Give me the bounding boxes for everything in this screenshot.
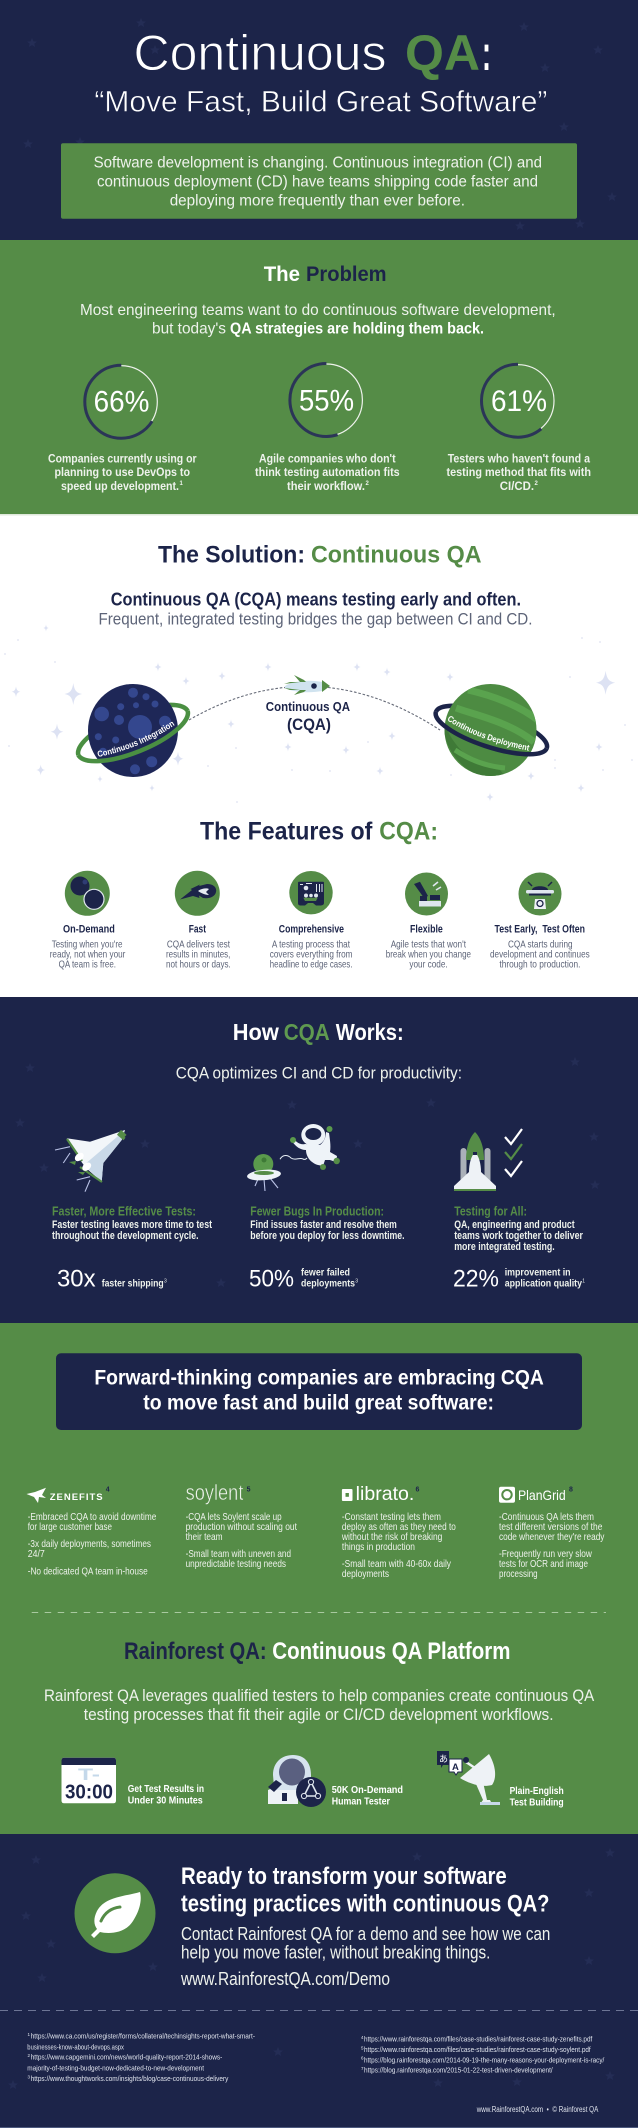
feature: flexible — [386, 872, 471, 970]
icon: astronaut tester — [268, 1755, 326, 1807]
text: CQA definition: Continuous QA (CQA) means testing early and often. — [111, 590, 521, 610]
company: soylent: -Small team with uneven and — [186, 1548, 291, 1560]
icon: satellite dish and language bubbles: あ — [439, 1754, 448, 1764]
feature: on-demand: ready, not when your — [50, 948, 126, 960]
stat: 50%: 50% — [249, 1266, 294, 1293]
footnotes: right column: 4 — [361, 2035, 364, 2040]
heading: rainforest platform: Continuous QA Platform — [272, 1638, 510, 1665]
feature: on-demand testers: Human Tester — [332, 1795, 390, 1807]
company: zenefits: 24/7 — [28, 1548, 45, 1560]
feature: test early, test often: CQA starts during — [508, 938, 573, 950]
company: zenefits — [26, 1487, 156, 1578]
text: contact: Contact Rainforest QA for a demo and see how we can — [181, 1924, 550, 1944]
company: soylent: production without scaling out — [186, 1521, 297, 1533]
caption: 66% — [48, 452, 197, 493]
feature: fast: results in minutes, — [166, 948, 230, 960]
footnotes: right column: https://www.rainforestqa.com/files/case-studies/rainforest-case-study-soylent.pdf — [364, 2045, 591, 2054]
company: soylent — [186, 1480, 297, 1570]
footnotes: right column — [361, 2035, 605, 2075]
icon: astronaut and UFO — [247, 1124, 340, 1191]
company: librato: -Small team with 40-60x daily — [342, 1558, 452, 1570]
benefit: fewer bugs: before you deploy for less downtime. — [250, 1230, 405, 1242]
company: librato — [341, 1484, 456, 1580]
title: QA — [405, 25, 480, 81]
callout: intro box: deploying more frequently than ever before. — [170, 193, 465, 210]
icon: launch and checkmarks — [454, 1129, 522, 1191]
caption: 55%: Agile companies who don't — [259, 452, 396, 466]
footnotes: left column — [27, 2032, 255, 2083]
caption: 61%: 2 — [534, 481, 538, 487]
icon: satellite dish and language bubbles — [437, 1751, 500, 1805]
icon: robot arm — [405, 872, 448, 916]
benefit: faster tests: Faster testing leaves more time to test — [52, 1219, 212, 1231]
feature: flexible: break when you change — [386, 948, 471, 960]
heading: rainforest platform — [124, 1638, 510, 1665]
feature: plain-English: Test Building — [510, 1796, 564, 1808]
callout: intro box: Software development is changing. Continuous integration (CI) and — [94, 155, 542, 172]
stat: 22%: application quality — [505, 1278, 582, 1290]
heading: call to action: Ready to transform your software — [181, 1863, 507, 1890]
footnotes: left column: majority-of-testing-budget-now-dedicated-to-new-development — [27, 2063, 205, 2072]
feature: 30 minute results — [62, 1758, 204, 1806]
stat ring: 66% — [85, 365, 158, 438]
footnotes: left column: https://www.thoughtworks.com/insights/blog/case-continuous-delivery — [31, 2074, 229, 2083]
logo: soylent: 5 — [247, 1487, 251, 1494]
feature: comprehensive — [270, 871, 353, 970]
text: problem intro: Most engineering teams want to do continuous software development, — [80, 302, 556, 319]
feature: comprehensive: headline to edge cases. — [270, 958, 352, 970]
heading: how CQA works: CQA — [284, 1019, 330, 1045]
feature: test early, test often: through to production. — [499, 958, 580, 970]
caption: 61%: Testers who haven't found a — [448, 452, 590, 466]
panel: the solution — [0, 516, 638, 997]
benefit: testing for all: more integrated testing. — [454, 1241, 555, 1253]
heading: the solution: The Solution: — [158, 542, 305, 569]
caption: 55%: their workflow. — [287, 479, 365, 493]
feature: on-demand testers: 50K On-Demand — [332, 1784, 403, 1796]
feature: comprehensive: A testing process that — [272, 938, 350, 950]
feature: flexible: Flexible — [410, 924, 443, 936]
company: librato: without the risk of breaking — [341, 1531, 443, 1543]
benefit: faster tests: Faster, More Effective Tests: — [52, 1205, 196, 1219]
panel: header — [0, 0, 638, 240]
caption: 61%: CI/CD. — [500, 479, 534, 493]
stat: 22%: improvement in — [505, 1267, 571, 1279]
label: continuous QA — [266, 699, 351, 734]
banner: forward-thinking companies: Forward-thinking companies are embracing CQA — [94, 1366, 544, 1389]
footnotes: left column: 3 — [28, 2074, 30, 2079]
feature: plain-English — [437, 1751, 564, 1808]
company: zenefits: for large customer base — [28, 1521, 112, 1533]
company: plangrid: processing — [499, 1568, 538, 1580]
icon: countdown timer: 30:00 — [65, 1782, 113, 1804]
callout: intro box: continuous deployment (CD) have teams shipping code faster and — [97, 174, 538, 191]
benefit: faster tests: throughout the development cycle. — [52, 1230, 199, 1242]
benefit: fewer bugs: Fewer Bugs In Production: — [250, 1205, 384, 1219]
feature: fast — [166, 871, 231, 970]
banner: forward-thinking companies — [56, 1353, 582, 1430]
label: continuous QA: Continuous QA — [266, 699, 351, 714]
company: soylent: unpredictable testing needs — [186, 1558, 286, 1570]
logo: zenefits: ZENEFITS — [50, 1492, 103, 1503]
text: contact: help you move faster, without breaking things. — [181, 1943, 490, 1963]
ring label: continuous integration: Continuous Integration — [98, 722, 175, 756]
footnotes: right column: https://www.rainforestqa.com/files/case-studies/rainforest-case-study-zenefits.pdf — [364, 2035, 593, 2044]
stat: 30x: 3 — [164, 1278, 167, 1284]
label: continuous QA: (CQA) — [287, 715, 331, 734]
feature: comprehensive: Comprehensive — [279, 924, 344, 936]
feature: on-demand: On-Demand — [63, 924, 115, 936]
stat: 30x — [57, 1266, 167, 1293]
stat: 30x: faster shipping — [102, 1278, 164, 1290]
stat ring: 55% — [290, 364, 363, 436]
benefit: fewer bugs: Find issues faster and resolve them — [250, 1219, 397, 1231]
company: plangrid — [499, 1487, 605, 1580]
feature: fast: CQA delivers test — [167, 938, 230, 950]
decorative starfield — [4, 624, 633, 803]
footer credit: www.RainforestQA.com • © Rainforest QA — [476, 2105, 599, 2114]
stat: 22%: 1 — [582, 1278, 585, 1284]
feature: on-demand: QA team is free. — [59, 958, 116, 970]
text: problem intro: QA strategies are holding them back. — [230, 320, 484, 337]
illustration: continuous deployment planet — [433, 684, 550, 776]
heading: the solution — [158, 542, 482, 569]
company: librato: deployments — [342, 1568, 389, 1580]
footnotes: right column: 6 — [361, 2056, 364, 2061]
text: platform intro: testing processes that fit their agile or CI/CD development workflows. — [84, 1706, 554, 1724]
footnotes: left column: 1 — [28, 2032, 30, 2037]
callout: intro box — [61, 143, 577, 219]
caption: 61% — [446, 452, 591, 493]
company: plangrid: -Frequently run very slow — [499, 1548, 592, 1560]
heading: call to action — [181, 1863, 550, 1918]
company: zenefits: -No dedicated QA team in-house — [28, 1566, 148, 1578]
company: plangrid: -Continuous QA lets them — [499, 1511, 594, 1523]
ring label: continuous deployment: Continuous Deployment — [448, 716, 530, 751]
benefit: testing for all — [453, 1205, 585, 1293]
icon: rainforest leaf logo — [74, 1873, 156, 1953]
text: platform intro: Rainforest QA leverages qualified testers to help companies create continuous QA — [44, 1687, 594, 1705]
icon: control panel — [289, 871, 333, 914]
icon: two planets — [65, 871, 110, 916]
arrow: dashed trajectory — [189, 686, 440, 730]
caption: 66%: speed up development. — [61, 479, 179, 493]
stat ring: 61% — [482, 364, 554, 437]
feature: flexible: your code. — [409, 958, 448, 970]
logo: zenefits: 4 — [106, 1487, 110, 1494]
feature: fast: Fast — [189, 924, 206, 936]
company: librato: deploy as often as they need to — [342, 1521, 456, 1533]
text: optimizes: CQA optimizes CI and CD for productivity: — [176, 1064, 462, 1082]
company: plangrid: test different versions of the — [499, 1521, 603, 1533]
illustration: continuous integration planet — [76, 684, 190, 777]
heading: the problem: The — [264, 263, 300, 286]
text: CQA definition: Frequent, integrated testing bridges the gap between CI and CD. — [98, 609, 532, 628]
stat: 30x: 30x — [57, 1266, 96, 1293]
feature: test early, test often — [490, 872, 590, 970]
title: Continuous — [134, 25, 386, 81]
icon: countdown timer — [62, 1758, 116, 1804]
text: problem intro — [80, 302, 556, 337]
text: CQA definition — [98, 590, 532, 628]
benefit: fewer bugs — [249, 1205, 405, 1293]
footnotes: right column: 5 — [361, 2045, 364, 2050]
icon: countdown timer: T- — [78, 1765, 100, 1784]
icon: rocket — [284, 675, 330, 695]
footnotes: right column: https://blog.rainforestqa.com/2015-01-22-test-driven-development/ — [364, 2066, 553, 2075]
feature: on-demand: Testing when you're — [52, 938, 123, 950]
footnotes: left column: https://www.ca.com/us/register/forms/collateral/techinsights-report-what-smart- — [31, 2032, 255, 2041]
heading: the problem — [264, 263, 387, 286]
text: contact: www.RainforestQA.com/Demo — [180, 1969, 390, 1989]
company: soylent: -CQA lets Soylent scale up — [186, 1511, 282, 1523]
heading: the problem: Problem — [306, 263, 387, 286]
feature: plain-English: Plain-English — [510, 1785, 564, 1797]
caption: 55%: 2 — [366, 481, 370, 487]
caption: 55% — [255, 452, 400, 493]
company: librato: -Constant testing lets them — [342, 1511, 441, 1523]
stat: 50%: deployments — [301, 1278, 355, 1290]
logo: plangrid: 8 — [569, 1487, 573, 1494]
heading: how CQA works: Works: — [336, 1019, 404, 1045]
caption: 66%: planning to use DevOps to — [54, 465, 190, 479]
panel: call to action and footer — [0, 1834, 638, 2128]
feature: on-demand — [50, 871, 126, 970]
feature: test early, test often: development and continues — [490, 948, 590, 960]
logo: librato: 6 — [416, 1487, 420, 1494]
company: librato: things in production — [342, 1541, 415, 1553]
heading: how CQA works: How — [233, 1019, 279, 1045]
icon: shuttle — [55, 1130, 126, 1192]
caption: 61%: testing method that fits with — [446, 465, 591, 479]
logo: zenefits — [26, 1487, 110, 1503]
footnotes: left column: businesses-know-about-devops.aspx — [27, 2042, 124, 2051]
benefit: testing for all: QA, engineering and product — [454, 1219, 575, 1231]
text: problem intro: but today's — [152, 320, 226, 337]
heading: call to action: testing practices with continuous QA? — [181, 1891, 550, 1918]
feature: comprehensive: covers everything from — [270, 948, 353, 960]
panel: the problem — [0, 240, 638, 516]
stat: 50% — [249, 1266, 358, 1293]
footnotes: right column: 7 — [361, 2066, 364, 2071]
caption: 55%: think testing automation fits — [255, 465, 400, 479]
logo: soylent: soylent — [186, 1480, 243, 1505]
heading: features: The Features of — [200, 817, 373, 845]
stat: 50%: 3 — [355, 1278, 358, 1284]
caption: 66%: 1 — [180, 481, 184, 487]
banner: forward-thinking companies: to move fast and build great software: — [143, 1391, 494, 1414]
company: zenefits: -Embraced CQA to avoid downtime — [28, 1511, 156, 1523]
heading: the solution: Continuous QA — [311, 542, 482, 569]
icon: satellite dish and language bubbles: A — [452, 1762, 459, 1773]
feature: 30 minute results: Under 30 Minutes — [128, 1794, 203, 1806]
heading: features: CQA: — [379, 817, 438, 845]
caption: 66%: Companies currently using or — [48, 452, 197, 466]
text: platform intro — [44, 1687, 594, 1724]
feature: test early, test often: Test Early, Test Often — [494, 924, 585, 936]
feature: 30 minute results: Get Test Results in — [128, 1783, 204, 1795]
feature: fast: not hours or days. — [166, 958, 231, 970]
text: contact — [180, 1924, 550, 1989]
footnotes: left column: https://www.capgemini.com/news/world-quality-report-2014-shows- — [31, 2053, 223, 2062]
panel: forward-thinking companies and platform — [0, 1323, 638, 1834]
feature: on-demand testers — [268, 1755, 403, 1807]
panel: how CQA works — [0, 997, 638, 1323]
title: : — [482, 25, 491, 81]
footnotes: left column: 2 — [28, 2053, 30, 2058]
company: plangrid: tests for OCR and image — [499, 1558, 588, 1570]
stat ring: 61%: 61% — [491, 385, 547, 418]
icon: comet — [175, 871, 220, 916]
benefit: testing for all: teams work together to deliver — [454, 1230, 584, 1242]
subtitle: “Move Fast, Build Great Software” — [94, 86, 547, 119]
stat ring: 66%: 66% — [94, 386, 149, 419]
logo: librato: librato. — [356, 1484, 414, 1505]
heading: rainforest platform: Rainforest QA: — [124, 1638, 267, 1665]
stat: 22% — [453, 1266, 585, 1293]
company: plangrid: code whenever they're ready — [499, 1531, 605, 1543]
company: soylent: their team — [186, 1531, 223, 1543]
stat: 22%: 22% — [453, 1266, 499, 1293]
stat ring: 55%: 55% — [299, 385, 354, 418]
company: zenefits: -3x daily deployments, sometimes — [28, 1538, 151, 1550]
stat: 50%: fewer failed — [301, 1267, 350, 1279]
heading: how CQA works — [233, 1019, 404, 1045]
logo: plangrid: PlanGrid — [518, 1487, 566, 1503]
benefit: faster tests — [52, 1205, 212, 1293]
icon: UFO and scale — [518, 872, 562, 916]
benefit: testing for all: Testing for All: — [454, 1205, 527, 1219]
feature: flexible: Agile tests that won't — [391, 938, 466, 950]
